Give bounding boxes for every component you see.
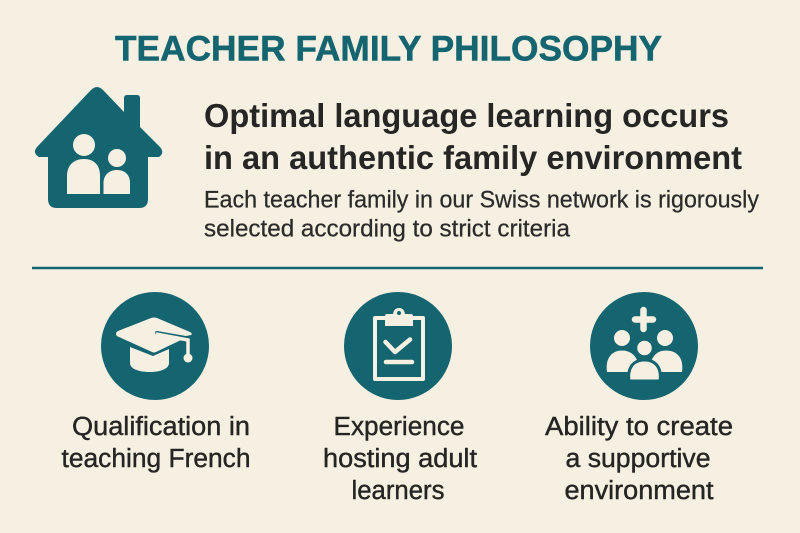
label: qualification — [62, 413, 250, 473]
label: supportive environment: a supportive — [566, 445, 710, 473]
heading: in an authentic family environment — [204, 139, 742, 176]
icon: house with family — [35, 87, 162, 208]
label: qualification: teaching French — [62, 445, 250, 473]
heading — [204, 97, 742, 176]
description text — [204, 186, 759, 242]
label: supportive environment — [545, 413, 733, 505]
icon: clipboard with check — [344, 292, 452, 400]
label: experience: Experience — [334, 413, 464, 441]
heading: Optimal language learning occurs — [204, 97, 729, 134]
icon: group with plus — [590, 292, 698, 400]
icon: graduation cap — [101, 292, 209, 400]
label: experience: hosting adult — [323, 445, 477, 473]
description text: Each teacher family in our Swiss network is rigorously — [204, 186, 759, 214]
label: qualification: Qualification in — [72, 413, 250, 441]
label: experience — [323, 413, 477, 505]
description text: selected according to strict criteria — [204, 216, 571, 242]
title: TEACHER FAMILY PHILOSOPHY — [115, 28, 662, 68]
label: supportive environment: Ability to create — [545, 413, 733, 441]
label: experience: learners — [352, 477, 444, 505]
label: supportive environment: environment — [564, 477, 714, 505]
